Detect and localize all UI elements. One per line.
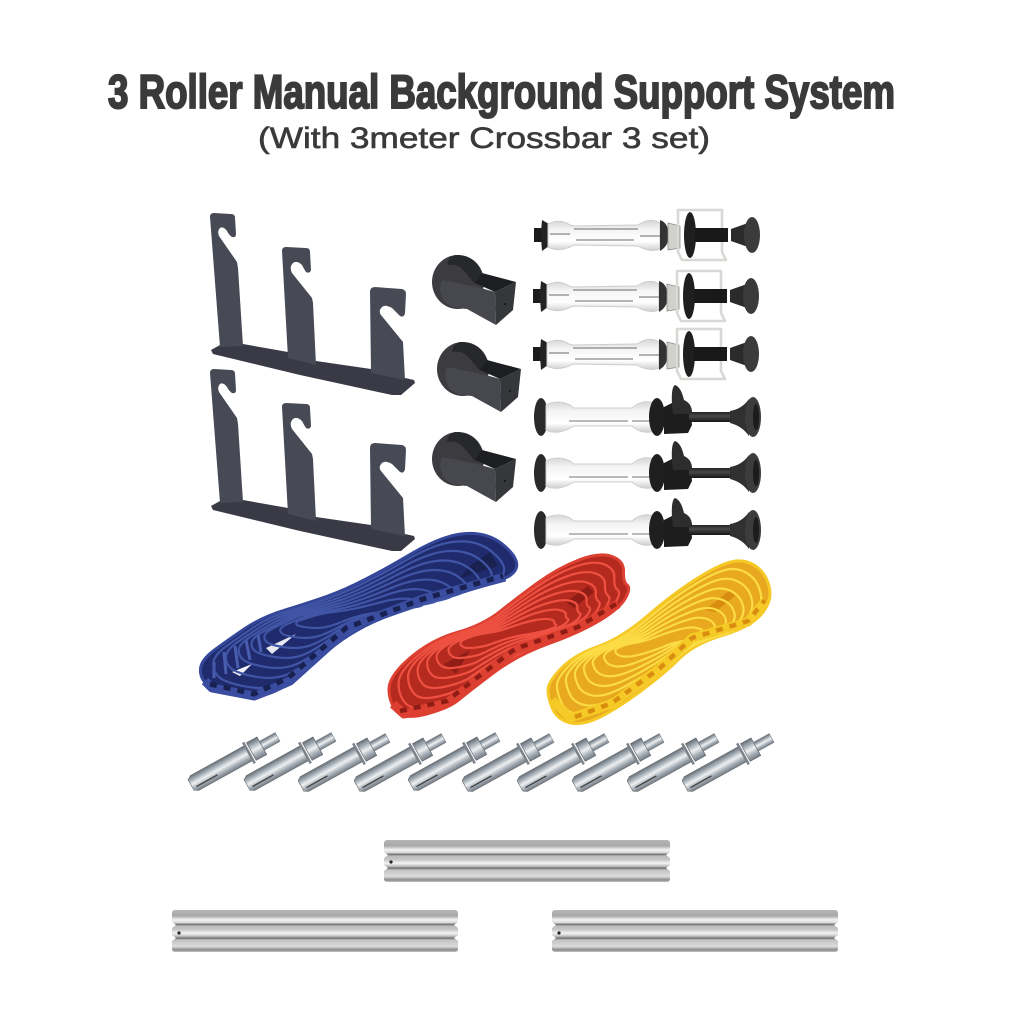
- clutch 3: [432, 432, 516, 502]
- crossbar: top: [384, 840, 670, 882]
- clutch 1: [432, 255, 516, 325]
- bracket: lower: [210, 369, 415, 551]
- spindle with frame 2: [533, 271, 759, 321]
- crossbar: left: [172, 910, 458, 952]
- crossbar: right: [552, 910, 838, 952]
- chain: red: [389, 555, 629, 716]
- drive spindle 1: [534, 385, 761, 437]
- drive spindle 2: [534, 441, 761, 493]
- spindle with frame 3: [533, 329, 759, 379]
- subtitle: (With 3meter Crossbar 3 set): [258, 122, 710, 155]
- spindle with frame 1: [534, 210, 760, 260]
- crossbars: [172, 840, 838, 952]
- roller clutches: [432, 255, 521, 502]
- bracket: upper: [210, 213, 415, 395]
- expansion bolts: [185, 727, 777, 796]
- drive spindle 3: [534, 498, 761, 550]
- wall brackets: [210, 213, 415, 551]
- clutch 2: [437, 342, 521, 412]
- chain: yellow: [548, 561, 770, 724]
- chain: blue: [200, 533, 517, 696]
- roller spindles: [533, 210, 761, 550]
